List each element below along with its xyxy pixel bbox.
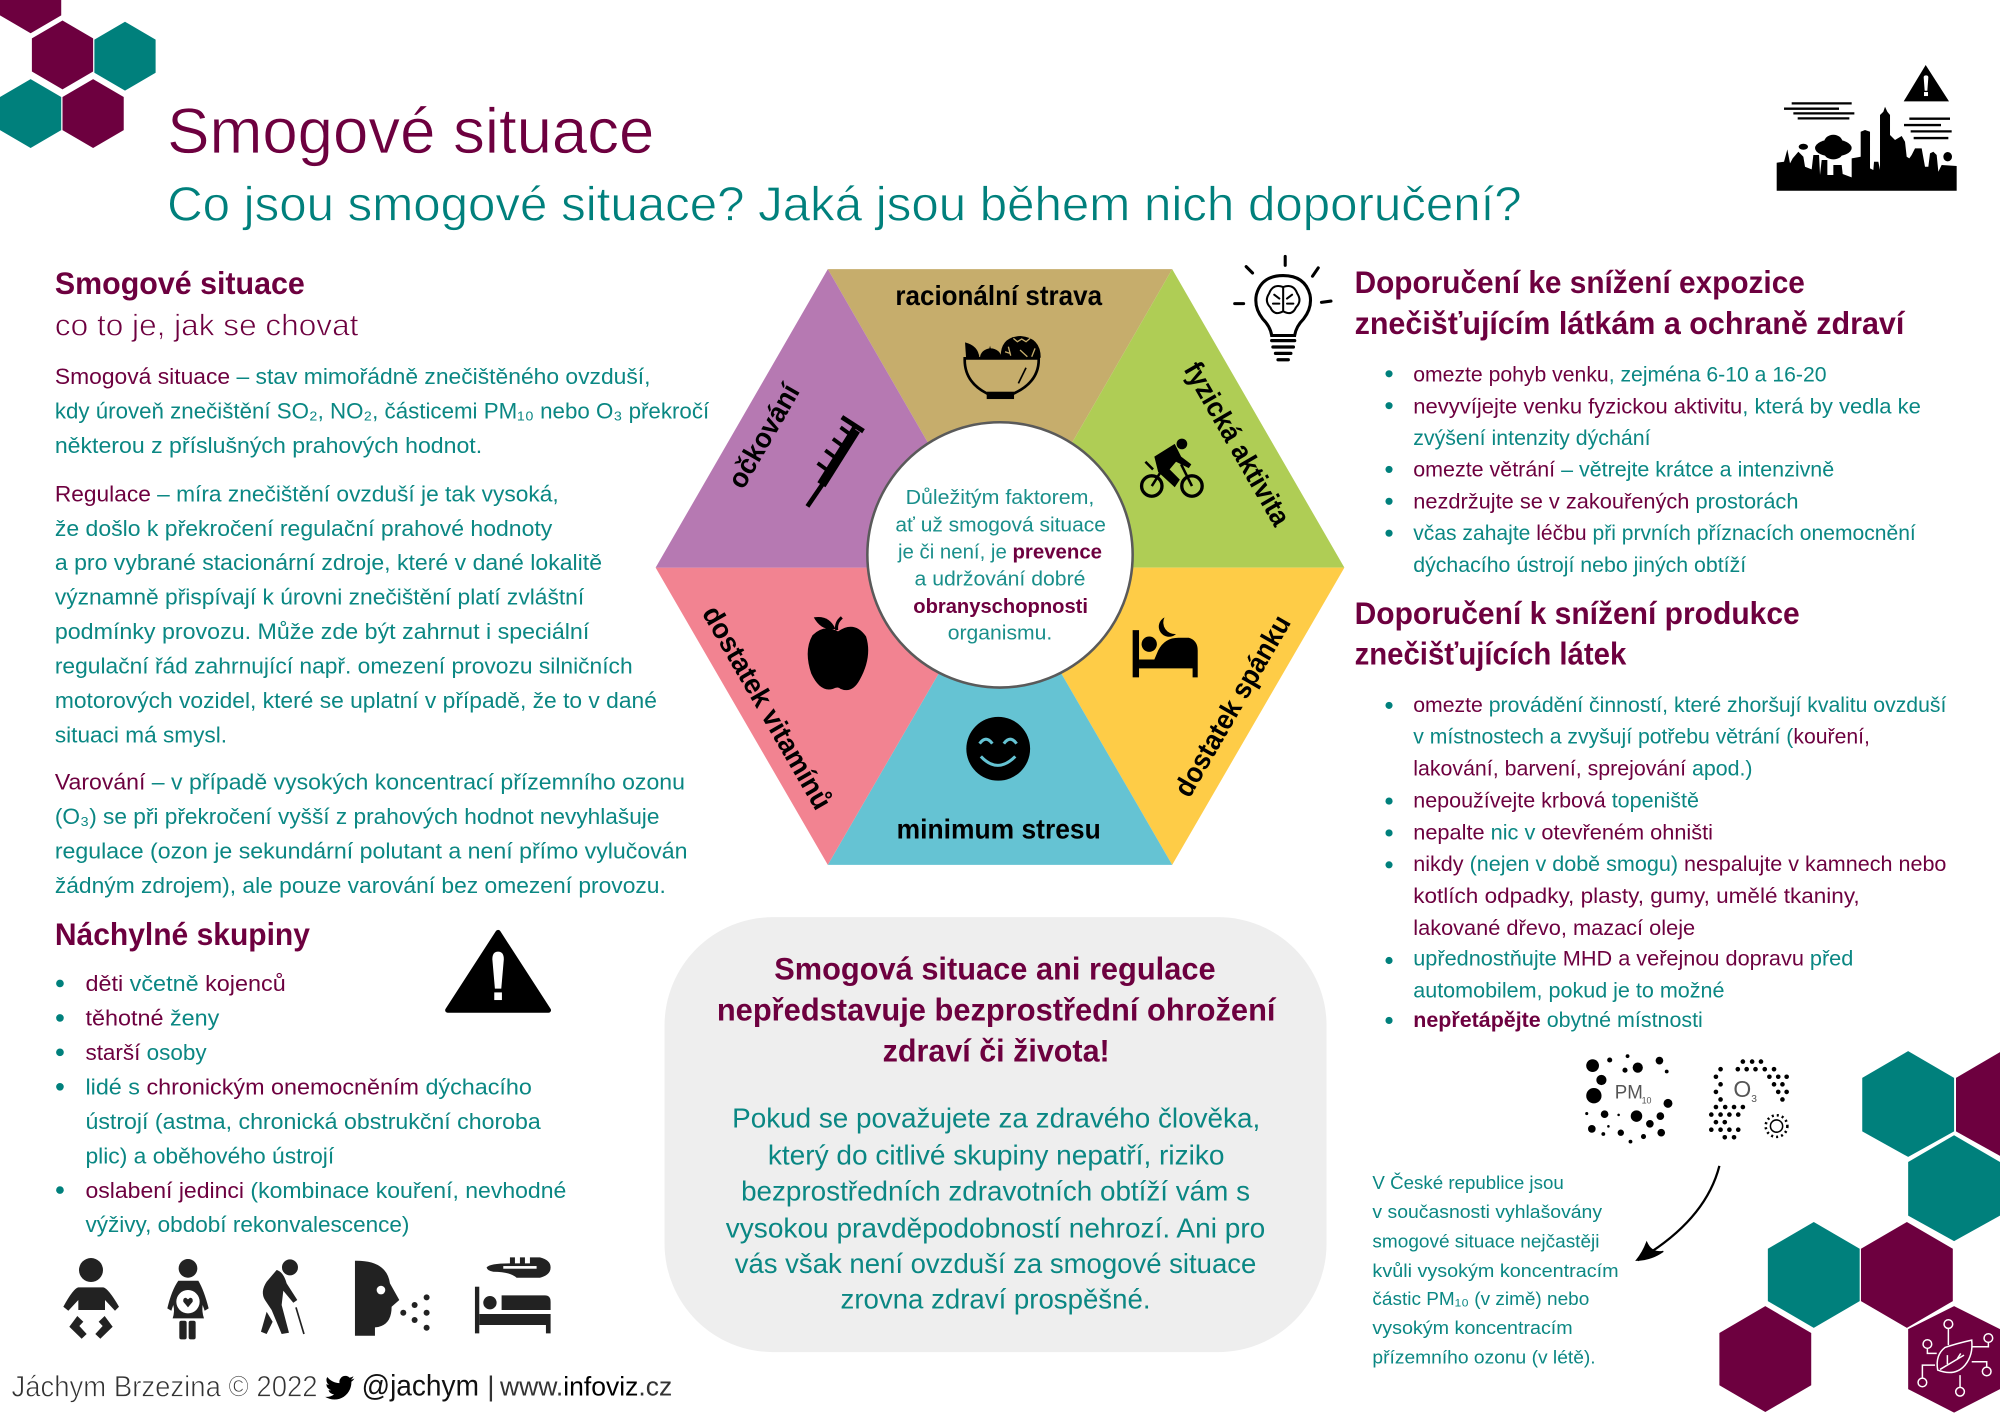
chart: prevention hexagon <box>656 269 1344 865</box>
text block: regulace: významně přispívají k úrovni znečištění platí zvláštní <box>55 585 585 610</box>
icon: leaf circuit <box>1918 1320 1993 1396</box>
text block: note about Czech Republic <box>1372 1172 1619 1368</box>
text block: smogová situace: kdy úroveň znečištění SO₂, NO₂, částicemi PM₁₀ nebo O₃ překročí <box>55 398 710 423</box>
list: vulnerable groups: starší osoby <box>85 1040 207 1065</box>
list: exposure: nezdržujte se v zakouřených prostorách <box>1413 489 1798 513</box>
list: vulnerable groups: děti včetně kojenců <box>85 971 286 996</box>
list: vulnerable groups: lidé s chronickým onemocněním dýchacího <box>85 1074 532 1099</box>
heading: exposure: znečišťujícím látkám a ochraně zdraví <box>1355 306 1906 341</box>
footer credit: Jáchym Brzezina © 2022 <box>11 1371 318 1404</box>
segment: fyzická aktivita <box>1000 269 1344 568</box>
callout heading <box>717 952 1277 1068</box>
label: dostatek spánku: dostatek spánku <box>1168 610 1297 802</box>
list: production: v místnostech a zvyšují potřebu větrání (kouření, <box>1413 725 1870 749</box>
list: production: nepoužívejte krbová topeniště <box>1413 788 1699 812</box>
text block: varování <box>55 770 688 898</box>
list: vulnerable groups: ústrojí (astma, chronická obstrukční choroba <box>85 1109 541 1134</box>
list: production: kotlích odpadky, plasty, gumy, umělé tkaniny, <box>1413 884 1860 908</box>
subheading: co to je, jak se chovat <box>55 309 359 343</box>
list: exposure <box>1385 362 1921 577</box>
text block: note about Czech Republic: smogové situace nejčastěji <box>1372 1230 1599 1251</box>
list: exposure: dýchacího ústrojí nebo jiných obtíží <box>1413 553 1746 577</box>
text block: note about Czech Republic: vysokým koncentracím <box>1372 1317 1573 1338</box>
list: production: automobilem, pokud je to možné <box>1413 978 1724 1002</box>
icon: PM10 particles: 10 <box>1642 1095 1652 1105</box>
text block: regulace: regulační řád zahrnující např. omezení provozu silničních <box>55 654 633 679</box>
callout heading: nepředstavuje bezprostřední ohrožení <box>717 992 1277 1027</box>
text block: regulace <box>55 481 657 747</box>
segment: dostatek spánku <box>1000 568 1344 865</box>
icon: PM10 particles <box>1585 1054 1672 1144</box>
circle: central message <box>867 422 1133 688</box>
list: exposure: nevyvíjejte venku fyzickou aktivitu , která by vedla ke <box>1413 394 1921 418</box>
list: production: nepalte nic v otevřeném ohništi <box>1413 820 1713 844</box>
text block: note about Czech Republic: kvůli vysokým koncentracím <box>1372 1260 1619 1281</box>
callout text: vysokou pravděpodobností nehrozí. Ani pro <box>726 1212 1265 1243</box>
icon: apple <box>808 617 868 690</box>
callout text: Pokud se považujete za zdravého člověka, <box>732 1103 1260 1134</box>
callout text: vás však není ovzduší za smogové situace <box>735 1248 1256 1279</box>
panel: callout <box>665 917 1327 1352</box>
text block: smogová situace: Smogová situace – stav mimořádně znečištěného ovzduší, <box>55 364 651 389</box>
icon: smiley <box>966 717 1030 781</box>
icon: pregnant woman <box>167 1259 209 1339</box>
icon: O3 molecules and sun: O <box>1733 1076 1751 1102</box>
icon: baby <box>63 1258 119 1339</box>
list: exposure: omezte větrání – větrejte krátce a intenzivně <box>1413 457 1834 481</box>
segment: racionální strava <box>828 269 1172 568</box>
icon: person breathing particles <box>355 1261 430 1336</box>
icon: light bulb with brain <box>1235 256 1331 360</box>
decorative hexagons top left <box>0 0 156 148</box>
callout text <box>726 1103 1265 1315</box>
circle: central message: obranyschopnosti <box>913 596 1088 618</box>
callout text: zrovna zdraví prospěšné. <box>841 1284 1151 1315</box>
decorative hexagons bottom right <box>1719 1051 2000 1413</box>
icon: cyclist <box>1142 439 1202 496</box>
list: vulnerable groups <box>56 971 566 1237</box>
callout text: který do citlivé skupiny nepatří, riziko <box>768 1140 1224 1171</box>
text block: varování: regulace (ozon je sekundární polutant a není přímo vylučován <box>55 838 688 863</box>
circle: central message: je či není, je prevence <box>897 542 1102 564</box>
list: production: upřednostňujte MHD a veřejnou dopravu před <box>1413 947 1853 971</box>
heading: exposure <box>1355 265 1906 341</box>
list: vulnerable groups: těhotné ženy <box>85 1006 220 1031</box>
footer credit: | <box>487 1370 495 1401</box>
label: minimum stresu: minimum stresu <box>897 814 1101 845</box>
text block: note about Czech Republic: přízemního ozonu (v létě). <box>1372 1347 1596 1368</box>
panel: right recommendations <box>1355 265 1946 1032</box>
text block: regulace: podmínky provozu. Může zde být zahrnut i speciální <box>55 619 590 644</box>
list: exposure: omezte pohyb venku, zejména 6-10 a 16-20 <box>1413 362 1827 386</box>
text block: varování: Varování – v případě vysokých koncentrací přízemního ozonu <box>55 770 685 795</box>
list: production: lakování, barvení, sprejování apod.) <box>1413 757 1753 781</box>
heading: náchylné skupiny: Náchylné skupiny <box>55 917 311 952</box>
heading: production <box>1355 596 1800 672</box>
footer credit: www.infoviz.cz <box>499 1371 672 1401</box>
icon: O3 molecules and sun: 3 <box>1751 1094 1757 1105</box>
callout text: bezprostředních zdravotních obtíží vám s <box>741 1175 1250 1206</box>
text block: regulace: motorových vozidel, které se uplatní v případě, že to v dané <box>55 688 657 713</box>
list: production: lakované dřevo, mazací oleje <box>1413 916 1695 940</box>
text block: note about Czech Republic: V České republice jsou <box>1372 1172 1564 1193</box>
list: vulnerable groups: výživy, období rekonvalescence) <box>85 1212 409 1237</box>
segment: dostatek vitamínů <box>656 568 1000 865</box>
text block: varování: (O₃) se při překročení vyšší z prahových hodnot nevyhlašuje <box>55 804 659 829</box>
list: production: omezte provádění činností, které zhoršují kvalitu ovzduší <box>1413 693 1946 717</box>
text block: smogová situace <box>55 364 710 458</box>
list: vulnerable groups: oslabení jedinci (kombinace kouření, nevhodné <box>85 1178 566 1203</box>
subtitle: Co jsou smogové situace? Jaká jsou během nich doporučení? <box>167 178 1522 232</box>
segment: minimum stresu <box>828 568 1172 865</box>
icon: salad bowl <box>965 336 1041 399</box>
circle: central message: Důležitým faktorem, <box>906 487 1094 509</box>
text block: note about Czech Republic: částic PM₁₀ (v zimě) nebo <box>1372 1288 1589 1309</box>
segment: očkování <box>656 269 1000 568</box>
icon: O3 molecules and sun <box>1709 1059 1789 1140</box>
title: Smogové situace <box>167 95 654 167</box>
text block: regulace: Regulace – míra znečištění ovzduší je tak vysoká, <box>55 481 559 506</box>
icon: bed with moon <box>1133 617 1198 677</box>
heading: production: znečišťujících látek <box>1355 637 1627 672</box>
footer credit: @jachym <box>362 1369 479 1402</box>
icon: warning triangle <box>448 932 548 1010</box>
callout heading: zdraví či života! <box>883 1033 1110 1068</box>
text block: varování: žádným zdrojem), ale pouze varování bez omezení provozu. <box>55 873 666 898</box>
text block: regulace: a pro vybrané stacionární zdroje, které v dané lokalitě <box>55 550 602 575</box>
callout heading: Smogová situace ani regulace <box>774 952 1216 987</box>
list: vulnerable groups: plic) a oběhového ústrojí <box>85 1143 335 1168</box>
label: fyzická aktivita: fyzická aktivita <box>1178 356 1297 531</box>
text block: regulace: že došlo k překročení regulační prahové hodnoty <box>55 516 553 541</box>
label: dostatek vitamínů: dostatek vitamínů <box>696 601 838 815</box>
icon: elderly person <box>261 1259 304 1334</box>
list: production: nepřetápějte obytné místnosti <box>1413 1008 1703 1032</box>
label: racionální strava: racionální strava <box>895 280 1102 311</box>
icon: sick in bed with thermometer <box>475 1257 551 1333</box>
list: production <box>1385 693 1946 1032</box>
list: production: nikdy (nejen v době smogu) nespalujte v kamnech nebo <box>1413 852 1946 876</box>
heading: smogové situace: Smogové situace <box>55 266 305 301</box>
icons: vulnerable groups <box>63 1257 551 1339</box>
list: exposure: zvýšení intenzity dýchání <box>1413 426 1651 450</box>
list: exposure: včas zahajte léčbu při prvních příznacích onemocnění <box>1413 521 1916 545</box>
circle: central message: ať už smogová situace <box>895 514 1106 536</box>
footer credit <box>11 1369 672 1404</box>
circle: central message: organismu. <box>948 623 1052 645</box>
icon: syringe <box>807 417 864 506</box>
arrow <box>1636 1166 1719 1260</box>
label: očkování: očkování <box>721 378 806 493</box>
icon: PM10 particles: PM <box>1615 1082 1643 1103</box>
text block: smogová situace: některou z příslušných prahových hodnot. <box>55 433 482 458</box>
heading: production: Doporučení k snížení produkce <box>1355 596 1800 631</box>
text block: regulace: situaci má smysl. <box>55 722 227 747</box>
panel: left text <box>55 266 710 1237</box>
circle: central message: a udržování dobré <box>915 569 1085 591</box>
heading: exposure: Doporučení ke snížení expozice <box>1355 265 1805 300</box>
text block: note about Czech Republic: v současnosti vyhlašovány <box>1372 1201 1603 1222</box>
icon: smog city skyline with warning <box>1777 65 1957 191</box>
